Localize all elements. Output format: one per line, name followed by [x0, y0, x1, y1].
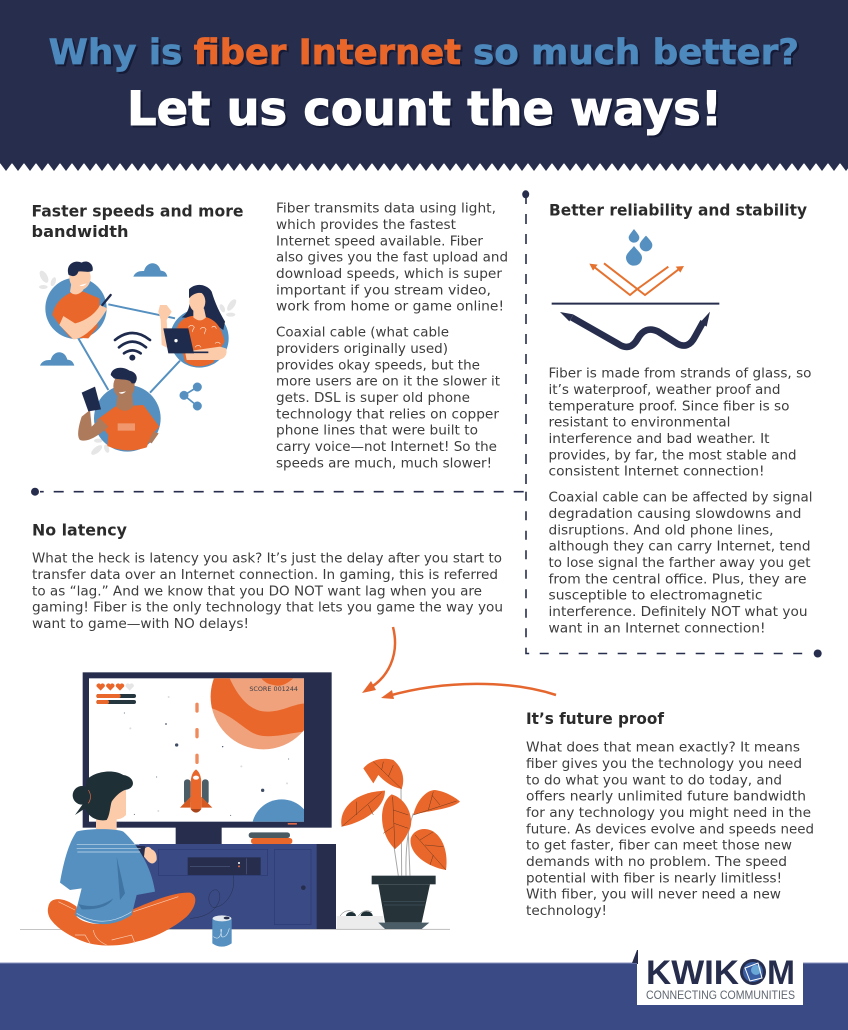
- logo: [632, 950, 803, 1005]
- text block: better reliability paragraphs: resistant to environmental: [548, 416, 730, 431]
- text block: no latency paragraph: transfer data over an Internet connection. In gaming, this is referred: [32, 568, 498, 583]
- text block: faster speeds paragraphs: download speeds, which is super: [276, 267, 503, 282]
- footer band: [0, 963, 848, 1030]
- text block: faster speeds paragraphs: which provides the fastest: [276, 218, 456, 233]
- text block: faster speeds paragraphs: work from home or game online!: [276, 300, 504, 315]
- text block: better reliability paragraphs: Coaxial cable can be affected by signal: [548, 491, 812, 506]
- heading: better reliability: Better reliability and stability: [549, 200, 808, 220]
- text block: better reliability paragraphs: [548, 367, 812, 636]
- text block: no latency paragraph: want to game—with NO delays!: [32, 617, 249, 632]
- monitor with game: SCORE 001244: [249, 686, 298, 693]
- title line 1: fiber Internet: [194, 33, 461, 73]
- text block: faster speeds paragraphs: speeds are much, much slower!: [276, 456, 492, 471]
- text block: better reliability paragraphs: provides, by far, the most stable and: [548, 448, 796, 463]
- text block: future proof paragraph: future. As devices evolve and speeds need: [526, 822, 814, 837]
- text block: future proof paragraph: What does that mean exactly? It means: [526, 741, 800, 756]
- text block: faster speeds paragraphs: phone lines that were built to: [276, 424, 478, 439]
- illustration: connected people: [38, 261, 238, 457]
- text block: faster speeds paragraphs: Fiber transmits data using light,: [276, 202, 496, 217]
- icon: logo globe: [740, 959, 766, 985]
- text block: faster speeds paragraphs: Coaxial cable (what cable: [276, 326, 449, 341]
- text block: no latency paragraph: to as “lag.” And we know that you DO NOT want lag when you are: [32, 584, 482, 599]
- title line 1: so much better?: [473, 33, 799, 73]
- text block: better reliability paragraphs: disruptions. And old phone lines,: [548, 523, 774, 538]
- text block: faster speeds paragraphs: gets. DSL is super old phone: [276, 391, 470, 406]
- text block: better reliability paragraphs: it’s waterproof, weather proof and: [548, 383, 780, 398]
- icon: water drops and fiber cable: [552, 229, 719, 347]
- text block: future proof paragraph: offers nearly unlimited future bandwidth: [526, 790, 806, 805]
- text block: better reliability paragraphs: although they can carry Internet, tend: [548, 540, 810, 555]
- heading: faster speeds: [32, 202, 244, 241]
- text block: no latency paragraph: gaming! Fiber is the only technology that lets you game the way you: [32, 601, 503, 616]
- arrow: from future proof to game scene: [381, 684, 556, 699]
- text block: better reliability paragraphs: interference. Definitely NOT what you: [548, 605, 808, 620]
- logo wordmark: M: [767, 954, 795, 992]
- text block: no latency paragraph: What the heck is latency you ask? It’s just the delay after you start to: [32, 552, 502, 567]
- heading: faster speeds: Faster speeds and more: [32, 202, 244, 221]
- heading: no latency: No latency: [32, 520, 128, 540]
- arrow: from no latency to game scene: [362, 627, 395, 693]
- text block: future proof paragraph: for any technology you might need in the: [526, 806, 811, 821]
- text block: faster speeds paragraphs: [276, 202, 508, 471]
- text block: better reliability paragraphs: degradation causing slowdowns and: [548, 507, 802, 522]
- header band: [0, 0, 848, 171]
- logo wordmark: [646, 954, 795, 992]
- text block: faster speeds paragraphs: also gives you the fast upload and: [276, 251, 508, 266]
- text block: future proof paragraph: to get faster, fiber can meet those new: [526, 839, 792, 854]
- text block: no latency paragraph: [32, 552, 503, 632]
- text block: future proof paragraph: fiber gives you the technology you need: [526, 757, 802, 772]
- text block: faster speeds paragraphs: important if you stream video,: [276, 283, 491, 298]
- text block: better reliability paragraphs: susceptible to electromagnetic: [548, 589, 762, 604]
- text block: better reliability paragraphs: want in an Internet connection!: [548, 621, 766, 636]
- text block: faster speeds paragraphs: more users are on it the slower it: [276, 375, 500, 390]
- text block: future proof paragraph: technology!: [526, 904, 607, 919]
- title line 2: Let us count the ways!: [127, 82, 722, 137]
- text block: better reliability paragraphs: to lose signal the farther away you get: [548, 556, 810, 571]
- heading: future proof: It’s future proof: [526, 709, 665, 728]
- text block: faster speeds paragraphs: Internet speed available. Fiber: [276, 234, 484, 249]
- title line 1: Why is: [49, 33, 182, 73]
- title: [49, 33, 799, 137]
- panel: faster speeds: [32, 202, 508, 471]
- text block: future proof paragraph: potential with fiber is nearly limitless!: [526, 871, 782, 886]
- logo tagline: CONNECTING COMMUNITIES: [646, 990, 795, 1002]
- text block: faster speeds paragraphs: provides okay speeds, but the: [276, 358, 480, 373]
- panel: no latency: [32, 520, 503, 632]
- text block: faster speeds paragraphs: carry voice—not Internet! So the: [276, 440, 497, 455]
- text block: better reliability paragraphs: consistent Internet connection!: [548, 465, 764, 480]
- text block: better reliability paragraphs: temperature proof. Since fiber is so: [548, 399, 790, 414]
- monitor with game: [82, 672, 332, 844]
- heading: faster speeds: bandwidth: [32, 222, 128, 241]
- panel: future proof: [526, 709, 814, 919]
- illustration: gaming scene: [20, 644, 460, 947]
- logo wordmark: KWIK: [646, 954, 739, 992]
- text block: future proof paragraph: demands with no problem. The speed: [526, 855, 787, 870]
- tv stand, books, plant, person: [48, 759, 460, 947]
- text block: better reliability paragraphs: interference and bad weather. It: [548, 432, 770, 447]
- text block: future proof paragraph: [526, 741, 814, 919]
- text block: future proof paragraph: to do what you want to do today, and: [526, 773, 782, 788]
- text block: faster speeds paragraphs: technology that relies on copper: [276, 407, 500, 422]
- text block: better reliability paragraphs: Fiber is made from strands of glass, so: [548, 367, 812, 382]
- text block: better reliability paragraphs: from the central office. Plus, they are: [548, 572, 807, 587]
- title line 1: [49, 33, 799, 73]
- text block: faster speeds paragraphs: providers originally used): [276, 342, 448, 357]
- text block: future proof paragraph: With fiber, you will never need a new: [526, 888, 781, 903]
- floor line: [20, 928, 450, 930]
- panel: better reliability: [548, 200, 812, 636]
- dashed dividers: [31, 190, 822, 658]
